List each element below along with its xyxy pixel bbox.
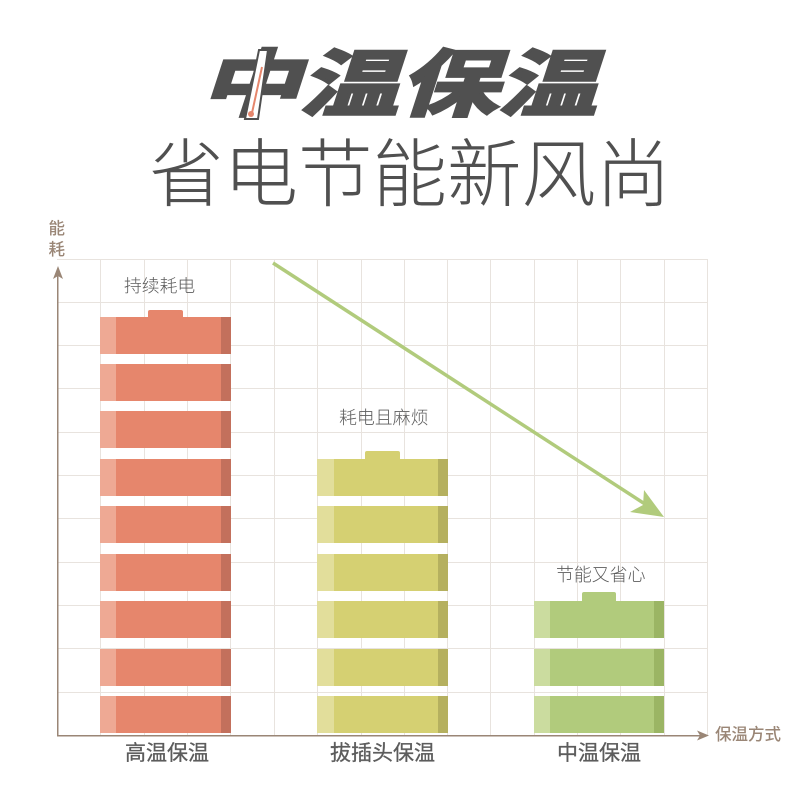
- y axis label: [48, 219, 66, 259]
- battery stack: [317, 459, 448, 733]
- trend arrow: [273, 263, 664, 517]
- category: 拔插头保温: 拔插头保温: [330, 742, 435, 765]
- label: 节能又省心: 节能又省心: [556, 565, 646, 585]
- label: 持续耗电: 持续耗电: [124, 276, 195, 296]
- category: 中温保温: 中温保温: [557, 742, 641, 765]
- x axis arrow: [57, 730, 709, 740]
- panel: medium temperature column: [534, 565, 664, 765]
- subtitle: 省电节能新风尚: [149, 134, 671, 216]
- x axis label: 保温方式: [715, 724, 782, 744]
- y axis label: 耗: [48, 240, 66, 259]
- y axis label: 能: [48, 219, 65, 238]
- category: 高温保温: 高温保温: [125, 742, 209, 765]
- title: 中温保温: 中温保温: [195, 44, 618, 126]
- battery stack: [534, 601, 664, 733]
- battery cap: [582, 592, 616, 601]
- battery cap: [148, 310, 183, 317]
- label: 耗电且麻烦: 耗电且麻烦: [339, 408, 428, 428]
- panel: high temperature column: [100, 276, 231, 765]
- icon: thermometer: [245, 50, 268, 119]
- battery cap: [365, 451, 400, 459]
- panel: plug-in column: [317, 408, 448, 765]
- y axis arrow: [53, 266, 63, 736]
- battery stack: [100, 317, 231, 733]
